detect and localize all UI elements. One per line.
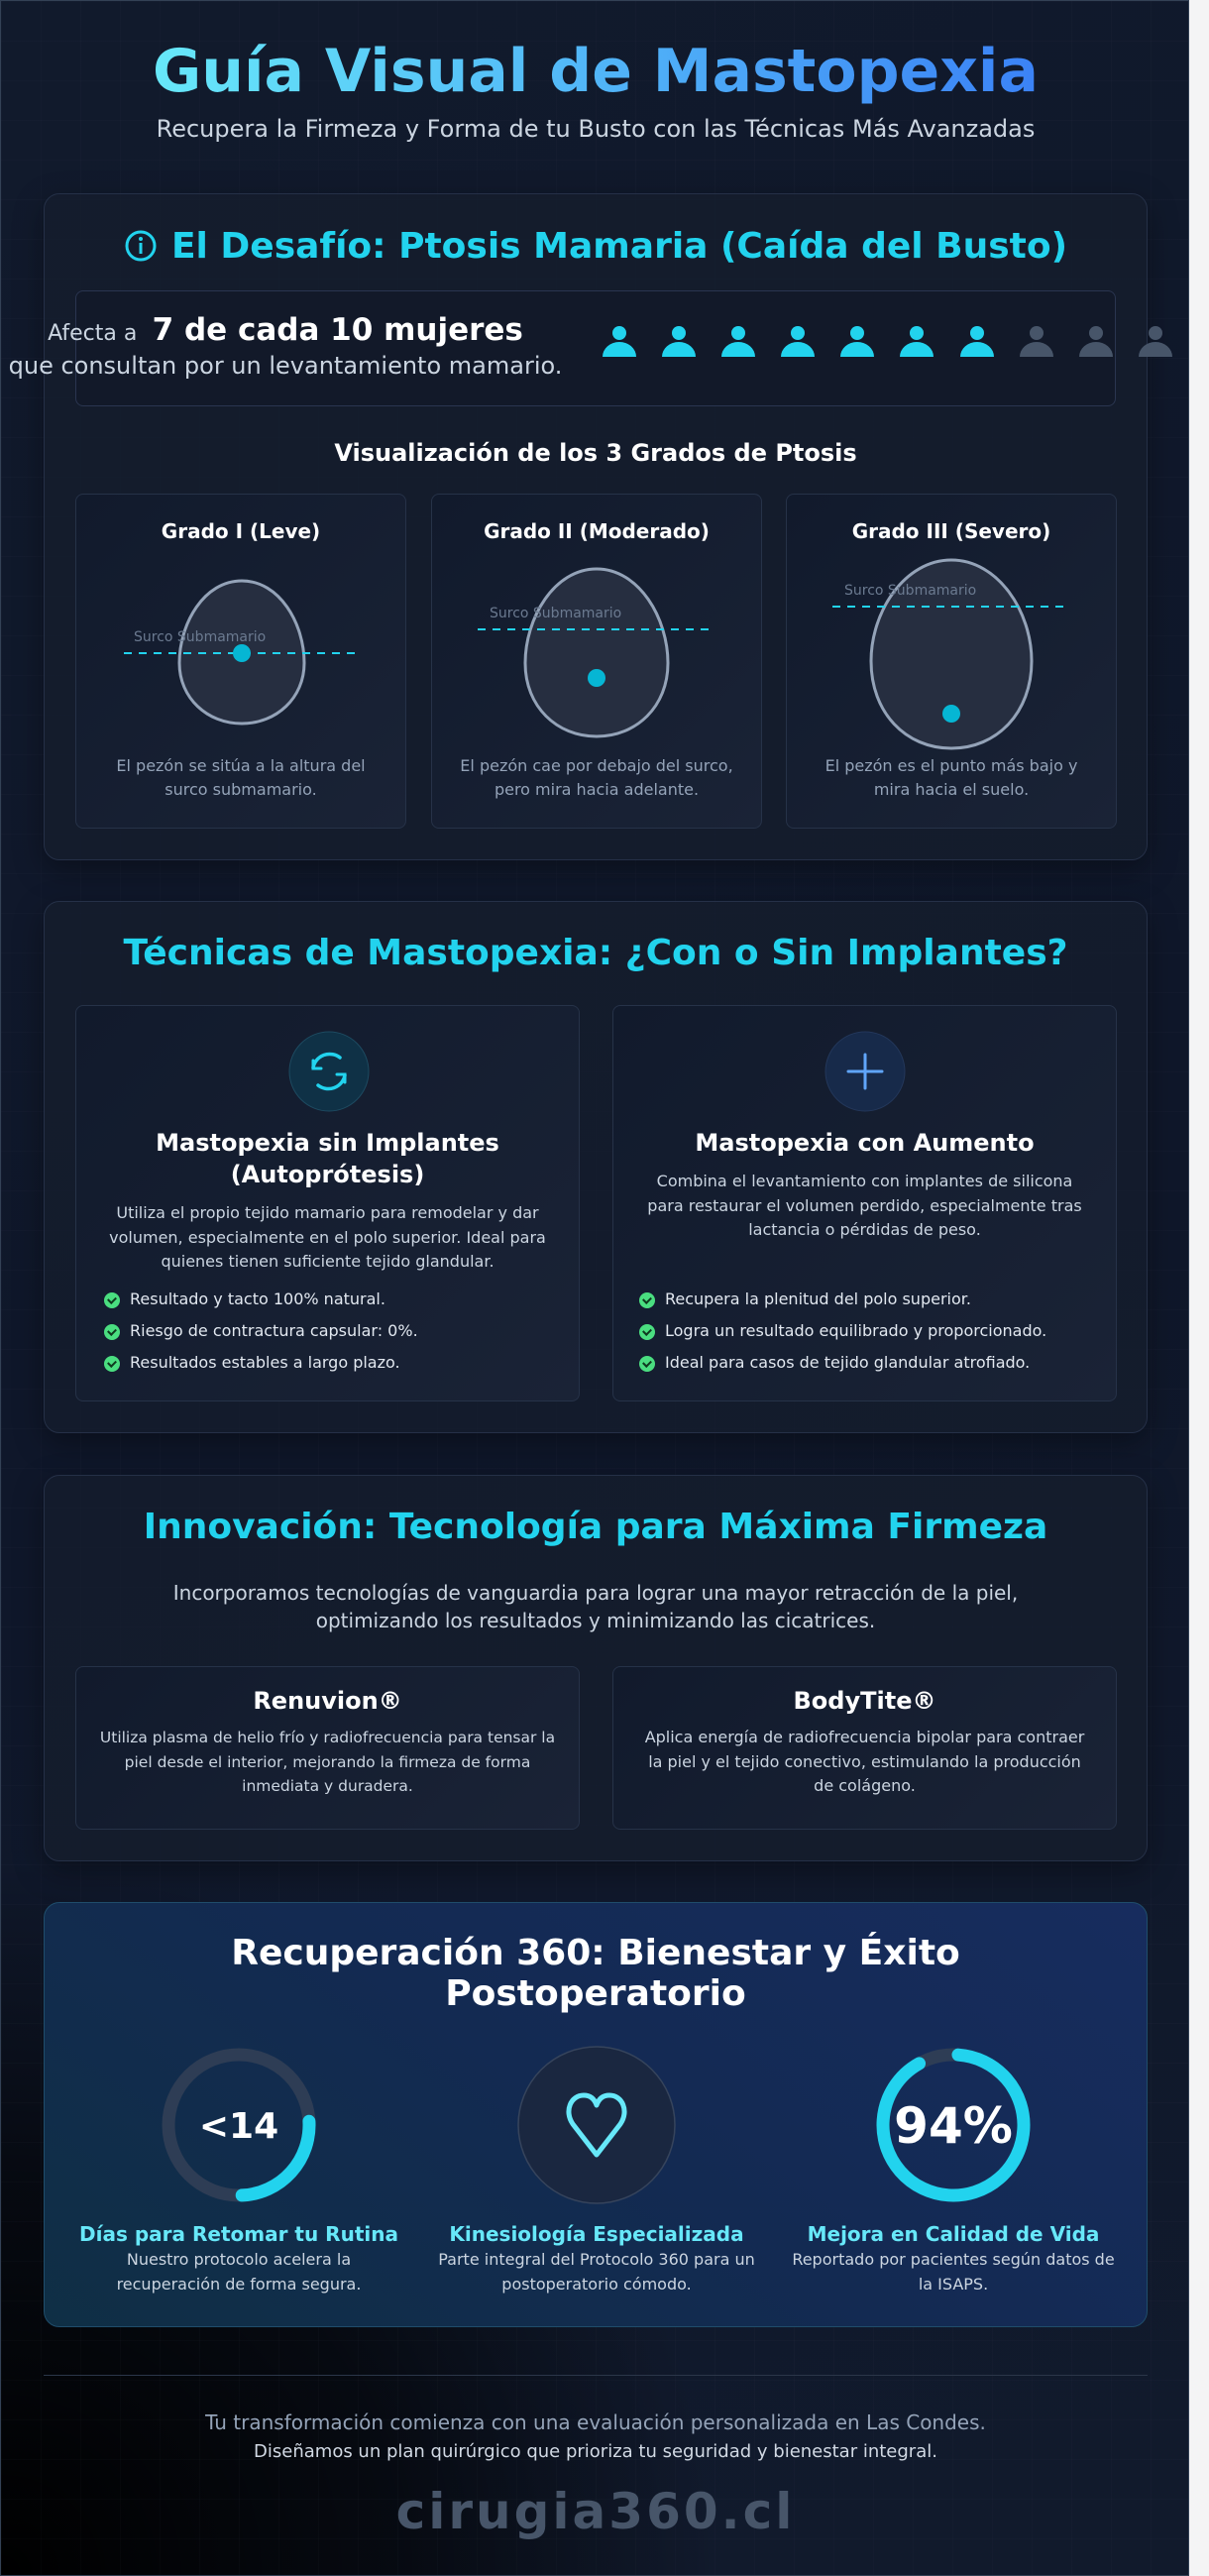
- card: con aumento: Ideal para casos de tejido glandular atrofiado.: [665, 1353, 1030, 1372]
- card: grade I: [75, 494, 406, 829]
- stat box: [75, 290, 1116, 406]
- card: grade I: Grado I (Leve): [162, 519, 320, 543]
- heading: recovery: [231, 1932, 960, 2014]
- stat text: que consultan por un levantamiento mamario.: [9, 352, 562, 380]
- card: Renuvion: [75, 1666, 580, 1830]
- label: kinesiology: Parte integral del Protocolo 360 para un: [438, 2250, 755, 2269]
- footer text: Diseñamos un plan quirúrgico que prioriza tu seguridad y bienestar integral.: [254, 2441, 937, 2462]
- card: sin implantes: Mastopexia sin Implantes: [156, 1129, 499, 1157]
- chart: 94% ring: [876, 2048, 1031, 2202]
- card: con aumento: Combina el levantamiento con implantes de silicona para restaurar el volumen perdido, especialmente tras lactancia o pérdidas de peso.: [647, 1172, 1082, 1239]
- card: BodyTite: [612, 1666, 1117, 1830]
- heading: innovation: Innovación: Tecnología para Máxima Firmeza: [144, 1507, 1047, 1547]
- heading: recovery: Recuperación 360: Bienestar y Éxito: [231, 1933, 960, 1973]
- label: days: Nuestro protocolo acelera la: [127, 2250, 351, 2269]
- card: con aumento: Mastopexia con Aumento: [695, 1129, 1035, 1157]
- stat text: [9, 312, 562, 380]
- chart: <14 days ring: <14: [199, 2106, 278, 2147]
- card: sin implantes: Utiliza el propio tejido mamario para remodelar y dar volumen, especialmente en el polo superior. Ideal para quienes tienen suficiente tejido glandular.: [109, 1203, 546, 1271]
- label: quality of life: [792, 2222, 1115, 2294]
- card: BodyTite: Aplica energía de radiofrecuencia bipolar para contraer la piel y el tejido conectivo, estimulando la producción de colágeno.: [645, 1728, 1084, 1795]
- intro text: optimizando los resultados y minimizando las cicatrices.: [316, 1609, 875, 1632]
- bullet list: [639, 1289, 1046, 1372]
- card: grade II: Grado II (Moderado): [484, 519, 710, 543]
- intro text: [173, 1581, 1018, 1632]
- heading: El Desafío: El Desafío: Ptosis Mamaria (Caída del Busto): [171, 226, 1067, 267]
- panel: techniques: [44, 901, 1148, 1433]
- diagram grade III: [832, 559, 1063, 749]
- diagram grade II: [478, 567, 709, 737]
- footer text: Tu transformación comienza con una evaluación personalizada en Las Condes.: [205, 2410, 986, 2434]
- intro text: Incorporamos tecnologías de vanguardia para lograr una mayor retracción de la piel,: [173, 1581, 1018, 1605]
- label: kinesiology: Kinesiología Especializada: [449, 2222, 744, 2246]
- card: grade III: El pezón es el punto más bajo y: [825, 756, 1077, 775]
- panel: ptosis challenge: [44, 193, 1148, 860]
- stat text: Afecta a 7 de cada 10 mujeres: [48, 312, 523, 348]
- bullet list: [104, 1289, 418, 1372]
- card: sin implantes: Resultados estables a largo plazo.: [130, 1353, 400, 1372]
- chart: 94% ring: 94%: [894, 2097, 1013, 2155]
- label: kinesiology: [438, 2222, 755, 2294]
- card: grade II: pero mira hacia adelante.: [495, 780, 699, 799]
- label: days: recuperación de forma segura.: [117, 2275, 361, 2294]
- diagram grade III: Surco Submamario: [844, 583, 976, 599]
- card: grade II: El pezón cae por debajo del surco,: [460, 756, 733, 775]
- icon: heart circle: [517, 2046, 676, 2204]
- card: grade I: surco submamario.: [165, 780, 317, 799]
- card: sin implantes: [75, 1005, 580, 1401]
- heading: recovery: Postoperatorio: [445, 1973, 746, 2014]
- title: Guía Visual de Mastopexia: [153, 37, 1039, 106]
- card: Renuvion: Renuvion®: [253, 1687, 402, 1715]
- heading: 3 grades: Visualización de los 3 Grados de Ptosis: [334, 439, 857, 467]
- diagram grade I: [124, 579, 355, 726]
- heading: techniques: Técnicas de Mastopexia: ¿Con o Sin Implantes?: [123, 933, 1068, 973]
- card: grade I: El pezón se sitúa a la altura del: [116, 756, 366, 775]
- label: days: [79, 2222, 398, 2294]
- panel: recovery 360: [44, 1902, 1148, 2327]
- label: quality of life: la ISAPS.: [919, 2275, 988, 2294]
- card: grade II: [431, 494, 762, 829]
- footer text: [205, 2410, 986, 2462]
- card: grade III: mira hacia el suelo.: [874, 780, 1029, 799]
- icon: plus: [824, 1031, 906, 1112]
- logo: cirugia360.cl: cirugia360.cl: [396, 2483, 795, 2540]
- card: con aumento: Logra un resultado equilibrado y proporcionado.: [665, 1321, 1046, 1340]
- card: sin implantes: Resultado y tacto 100% natural.: [130, 1289, 385, 1308]
- label: kinesiology: postoperatorio cómodo.: [501, 2275, 692, 2294]
- chart: <14 days ring: [163, 2048, 315, 2202]
- label: days: Días para Retomar tu Rutina: [79, 2222, 398, 2246]
- card: Renuvion: Utiliza plasma de helio frío y radiofrecuencia para tensar la piel desde el interior, mejorando la firmeza de forma inmediata y duradera.: [100, 1729, 555, 1795]
- card: con aumento: Recupera la plenitud del polo superior.: [665, 1289, 971, 1308]
- card: grade III: Grado III (Severo): [852, 519, 1050, 543]
- diagram grade II: Surco Submamario: [490, 606, 621, 621]
- icons: people 7 of 10: [603, 326, 1172, 357]
- card: grade III: [786, 494, 1117, 829]
- label: quality of life: Reportado por pacientes según datos de: [792, 2250, 1115, 2269]
- card: sin implantes: Riesgo de contractura capsular: 0%.: [130, 1321, 418, 1340]
- card: con aumento: [612, 1005, 1117, 1401]
- panel: innovation: [44, 1475, 1148, 1861]
- icon: refresh: [289, 1031, 369, 1112]
- card: sin implantes: (Autoprótesis): [231, 1161, 424, 1188]
- subtitle: Recupera la Firmeza y Forma de tu Busto con las Técnicas Más Avanzadas: [157, 115, 1035, 143]
- card: BodyTite: BodyTite®: [794, 1687, 935, 1715]
- diagram grade I: Surco Submamario: [134, 629, 266, 645]
- label: quality of life: Mejora en Calidad de Vida: [808, 2222, 1099, 2246]
